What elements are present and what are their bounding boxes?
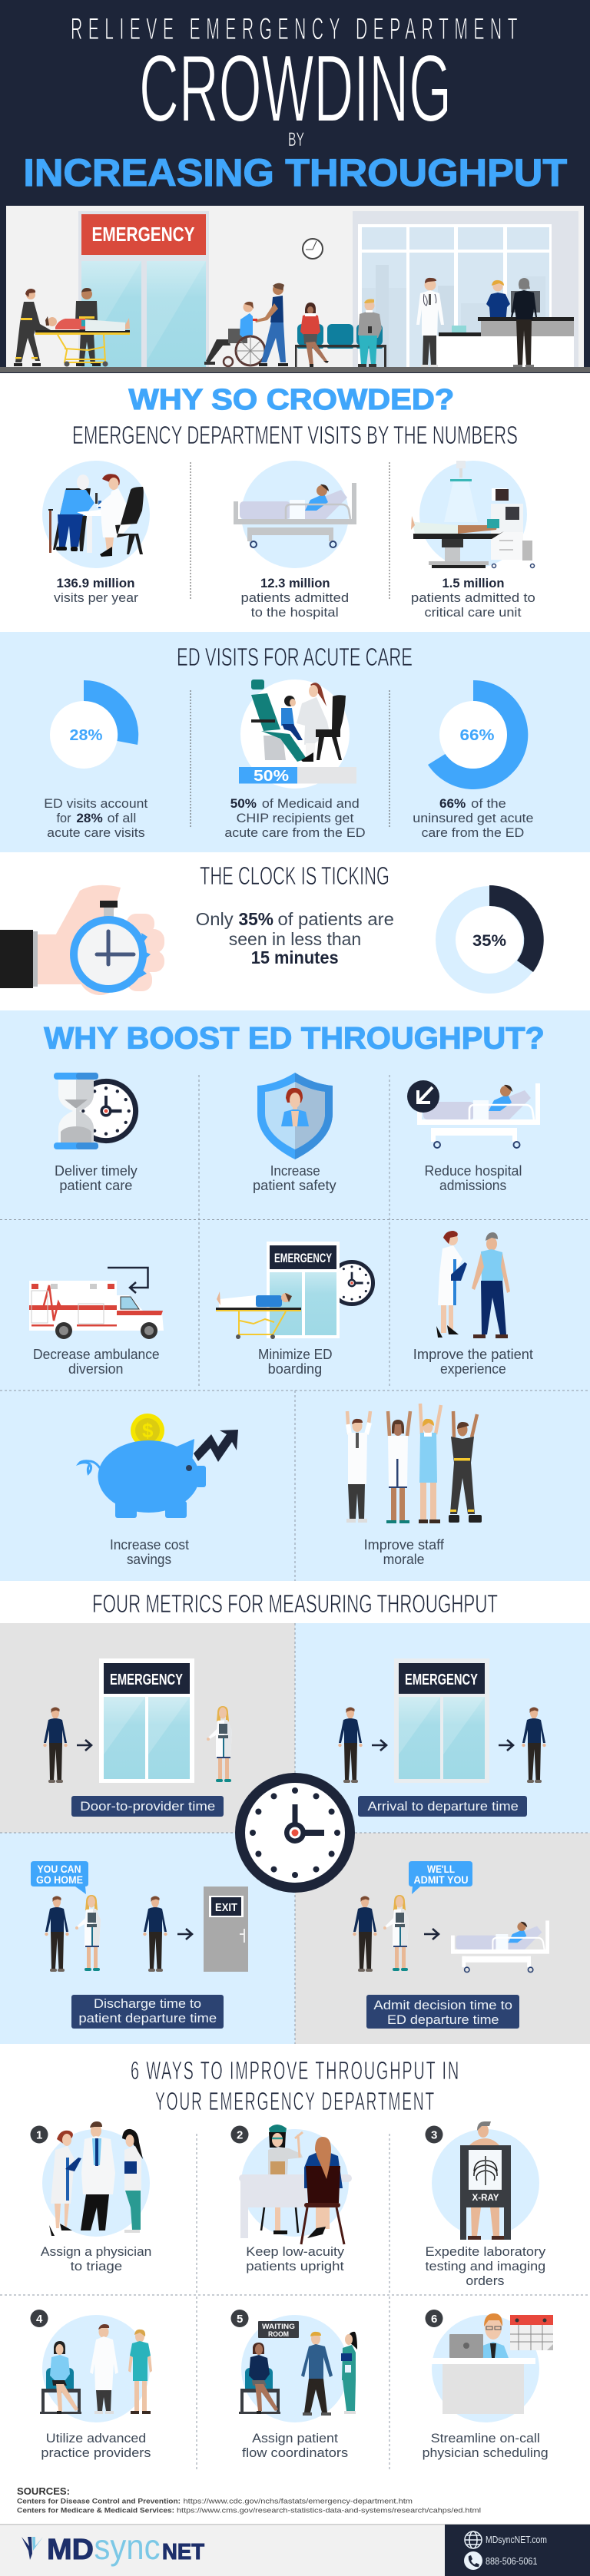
text: decrease ambulance diversion — [33, 1347, 160, 1377]
illustration: child in exam chair with bar — [239, 680, 356, 789]
text: expedite laboratory — [426, 2244, 546, 2288]
title word: by: BY — [288, 129, 304, 150]
text: keep low acuity — [246, 2244, 345, 2273]
illustration: hospital entrance scene — [0, 206, 590, 372]
number badges row two: 6 — [431, 2313, 437, 2326]
text: streamline on-call — [423, 2431, 549, 2460]
stat: admitted to hospital: 12.3 million — [260, 576, 330, 590]
number badges row two: 4 — [36, 2313, 43, 2326]
icon: central clock — [240, 1778, 350, 1887]
doctor — [416, 278, 444, 367]
text: deliver timely patient care: patient care — [59, 1178, 132, 1193]
text: reduce hospital admissions: admissions — [439, 1178, 506, 1193]
text: 66 percent of uninsured — [413, 796, 533, 840]
donut chart: 28 percent — [50, 680, 138, 769]
icon: doctor and patient — [436, 1231, 510, 1338]
text: utilize advanced: practice providers — [41, 2445, 151, 2460]
way 4: advanced practice providers — [40, 2315, 152, 2422]
number badges row two: 5 — [237, 2313, 243, 2326]
stat: visits per year — [54, 576, 138, 605]
text: deliver timely patient care: Deliver timely — [55, 1163, 138, 1179]
text: 28 percent of acute visits: ED visits account — [44, 796, 148, 811]
sources: https://www.cdc.gov/nchs/fastats/emergency-department.htm — [183, 2497, 413, 2506]
speech bubble: we'll admit you — [409, 1861, 472, 1894]
logo: MDsyncNET: MD — [47, 2534, 94, 2566]
text: reduce hospital admissions — [424, 1163, 522, 1193]
sources: SOURCES: — [17, 2485, 70, 2497]
text: improve staff morale: Improve staff — [364, 1537, 445, 1553]
stat: admitted to critical care — [411, 576, 535, 620]
panel: ED visits for acute care — [0, 632, 590, 852]
heading: ED visits for acute care: ED VISITS FOR ACUTE CARE — [177, 643, 413, 671]
way 6: on-call physician scheduling — [432, 2313, 553, 2422]
text: 50 percent of Medicaid and CHIP: CHIP recipients get — [237, 811, 354, 825]
sign: waiting room: ROOM — [268, 2330, 289, 2339]
sign: waiting room: WAITING — [262, 2323, 295, 2331]
number badges row one — [31, 2125, 442, 2144]
text: 28 percent of acute visits: of all — [108, 811, 136, 825]
sign: waiting room — [258, 2321, 299, 2339]
text: improve patient experience — [413, 1347, 533, 1377]
progress bar: 50 percent — [239, 767, 356, 785]
icon: piggy bank with coin and arrow: $ — [142, 1419, 154, 1442]
text: assign a physician: to triage — [71, 2259, 122, 2273]
text: only 35 percent: 35% — [238, 909, 273, 929]
text: 66 percent of uninsured: care from the ED — [422, 825, 524, 840]
reception desk — [436, 291, 574, 367]
text: assign a physician: Assign a physician — [41, 2244, 151, 2259]
text: assign a physician — [41, 2244, 151, 2273]
contact box: 888-506-5061 — [486, 2555, 538, 2567]
text: 28 percent of acute visits — [44, 796, 148, 840]
text: only 35 percent — [196, 909, 394, 967]
text: improve patient experience: Improve the patient — [413, 1347, 533, 1362]
text: increase cost savings: Increase cost — [110, 1537, 189, 1553]
speech bubble: you can go home: GO HOME — [36, 1873, 83, 1886]
speech bubble: you can go home — [31, 1861, 88, 1894]
number badges row one: 2 — [237, 2128, 243, 2142]
sources: https://www.cms.gov/research-statistics-data-and-systems/research/cahps/ed.html — [177, 2506, 481, 2515]
donut chart: 66 percent — [428, 680, 528, 789]
title line: increasing throughput: INCREASING THROUGHPUT — [23, 151, 567, 194]
text: increase patient safety: patient safety — [253, 1178, 336, 1193]
text: only 35 percent: seen in less than — [229, 929, 361, 949]
exit door: EXIT — [215, 1901, 237, 1914]
text: minimize ED boarding — [258, 1347, 332, 1377]
icon: ED boarding: EMERGENCY — [274, 1251, 332, 1265]
text: streamline on-call: Streamline on-call — [431, 2431, 540, 2445]
waiting room window — [353, 211, 578, 367]
text: 50 percent of Medicaid and CHIP — [224, 796, 366, 840]
text: streamline on-call: physician scheduling — [423, 2445, 549, 2460]
text: 66 percent of uninsured: uninsured get acute — [413, 811, 533, 825]
way 1: assign a physician to triage — [42, 2121, 150, 2237]
donut chart: 28 percent: 28% — [69, 727, 103, 744]
text: improve patient experience: experience — [440, 1361, 506, 1377]
icon: phone — [464, 2551, 482, 2570]
icon: hand holding stopwatch — [0, 885, 164, 995]
text: improve staff morale: morale — [383, 1552, 424, 1567]
stat: admitted to hospital — [241, 576, 349, 620]
stretcher with patient — [35, 316, 130, 367]
metric: discharge to departure — [31, 1861, 248, 2029]
text: 28 percent of acute visits: for — [57, 811, 71, 825]
icon: ED boarding — [216, 1242, 373, 1339]
text: 50 percent of Medicaid and CHIP: acute care from the ED — [224, 825, 366, 840]
panel: why so crowded — [42, 384, 535, 620]
stat: visits per year: 136.9 million — [57, 576, 135, 590]
panel: four metrics — [0, 1589, 590, 2044]
text: assign patient — [242, 2431, 348, 2460]
metric: arrival to departure: EMERGENCY — [405, 1672, 478, 1688]
icon: patient visiting doctor — [42, 461, 150, 568]
heading: why boost ED throughput: WHY BOOST ED THROUGHPUT? — [44, 1021, 545, 1055]
donut chart: 35 percent — [446, 885, 544, 984]
way 3: expedite lab and imaging: X-RAY — [472, 2192, 499, 2203]
emergency doors — [78, 211, 209, 367]
text: decrease ambulance diversion: Decrease ambulance — [33, 1347, 160, 1362]
icon: hospital bed — [234, 461, 356, 568]
panel: the clock is ticking — [0, 861, 544, 995]
exit door — [204, 1887, 248, 1972]
waiting room seats and visitors — [295, 299, 386, 367]
receptionist — [486, 280, 510, 317]
text: 66 percent of uninsured: of the — [471, 796, 506, 811]
metric: admit decision to departure: Admit decision time to — [373, 1998, 512, 2012]
paramedic right — [75, 288, 101, 366]
text: increase patient safety — [253, 1163, 336, 1193]
metric: door to provider — [43, 1658, 232, 1817]
text: deliver timely patient care — [55, 1163, 138, 1193]
sources — [17, 2485, 481, 2515]
text: keep low acuity: patients upright — [246, 2259, 344, 2273]
wall clock — [303, 239, 323, 259]
panel: why boost ED throughput — [0, 1010, 590, 1581]
logo: MDsyncNET: NET — [162, 2540, 204, 2564]
text: assign patient: flow coordinators — [242, 2445, 348, 2460]
number badges row one: 1 — [36, 2128, 42, 2142]
text: decrease ambulance diversion: diversion — [68, 1361, 123, 1377]
panel: six ways to improve — [0, 2056, 590, 2471]
progress bar: 50 percent: 50% — [254, 768, 289, 785]
logo: MDsyncNET — [22, 2527, 204, 2567]
text: 66 percent of uninsured: 66% — [439, 796, 466, 811]
stat: admitted to critical care: 1.5 million — [442, 576, 504, 590]
text: increase patient safety: Increase — [270, 1163, 320, 1179]
text: expedite laboratory: Expedite laboratory — [426, 2244, 546, 2259]
metric: discharge to departure: patient departure time — [78, 2011, 217, 2025]
metric: admit decision to departure: ED departure time — [387, 2012, 499, 2027]
sources: Centers for Disease Control and Prevention: — [17, 2497, 181, 2506]
icon: celebrating staff — [346, 1404, 482, 1523]
metric: door to provider: EMERGENCY — [110, 1672, 183, 1688]
text: minimize ED boarding: boarding — [268, 1361, 322, 1377]
text: increase cost savings: savings — [127, 1552, 171, 1567]
speech bubble: you can go home: YOU CAN — [37, 1863, 81, 1875]
heading: clock is ticking: THE CLOCK IS TICKING — [200, 861, 389, 890]
wheelchair patient and helper — [204, 283, 288, 366]
text: expedite laboratory: testing and imaging — [426, 2259, 545, 2273]
stat: admitted to critical care: patients admitted to — [411, 590, 535, 605]
text: 50 percent of Medicaid and CHIP: 50% — [230, 796, 257, 811]
text: reduce hospital admissions: Reduce hospital — [424, 1163, 522, 1179]
icon: globe — [465, 2531, 482, 2548]
stat: admitted to critical care: critical care unit — [424, 605, 522, 620]
metric: discharge to departure: Discharge time to — [94, 1996, 201, 2011]
heading: why so crowded: WHY SO CROWDED? — [129, 384, 454, 416]
metric: door to provider: Door-to-provider time — [80, 1799, 215, 1814]
contact box: MDsyncNET.com — [486, 2534, 547, 2545]
stat: visits per year: visits per year — [54, 590, 138, 605]
metric: arrival to departure: Arrival to departure time — [367, 1799, 519, 1814]
number badges row two — [31, 2310, 442, 2327]
stat: admitted to hospital: to the hospital — [251, 605, 339, 620]
text: 50 percent of Medicaid and CHIP: of Medicaid and — [262, 796, 360, 811]
text: increase cost savings — [110, 1537, 189, 1567]
emergency doors: EMERGENCY — [92, 223, 195, 246]
icon: piggy bank with coin and arrow — [79, 1414, 238, 1518]
text: only 35 percent: 15 minutes — [251, 947, 339, 967]
icon: ambulance with diversion arrow — [29, 1268, 164, 1339]
metric: arrival to departure — [338, 1658, 546, 1817]
text: utilize advanced: Utilize advanced — [46, 2431, 146, 2445]
text: minimize ED boarding: Minimize ED — [258, 1347, 332, 1362]
text: expedite laboratory: orders — [466, 2273, 504, 2288]
speech bubble: we'll admit you: ADMIT YOU — [413, 1873, 469, 1886]
icon: reduced admissions bed — [407, 1080, 540, 1148]
number badges row one: 3 — [431, 2128, 437, 2142]
logo: MDsyncNET: sync — [94, 2527, 160, 2567]
paramedic left — [14, 289, 51, 366]
way 2: keep low acuity patients upright — [239, 2125, 352, 2244]
icon: critical care operating table — [411, 461, 535, 568]
text: keep low acuity: Keep low-acuity — [246, 2244, 345, 2259]
footer — [0, 2524, 590, 2576]
text: utilize advanced — [41, 2431, 151, 2460]
stat: admitted to hospital: patients admitted — [241, 590, 349, 605]
text: 28 percent of acute visits: acute care visits — [47, 825, 145, 840]
contact box — [445, 2525, 590, 2576]
text: improve staff morale — [364, 1537, 445, 1567]
icon: patient safety shield — [257, 1073, 333, 1159]
way 5: patient flow coordinators — [239, 2315, 357, 2422]
text: assign patient: Assign patient — [252, 2431, 338, 2445]
metric: admit decision to departure — [353, 1861, 549, 2029]
text: only 35 percent: Only — [196, 909, 234, 929]
panel: header — [0, 0, 590, 373]
donut chart: 35 percent: 35% — [472, 932, 506, 950]
visitor at desk — [511, 278, 537, 367]
sources: Centers for Medicare & Medicaid Services: — [17, 2506, 174, 2515]
text: only 35 percent: of patients are — [278, 909, 394, 929]
icon: hourglass and clock — [54, 1073, 136, 1149]
text: 28 percent of acute visits: 28% — [76, 811, 103, 825]
speech bubble: we'll admit you: WE'LL — [427, 1863, 455, 1875]
way 3: expedite lab and imaging — [432, 2121, 539, 2240]
donut chart: 66 percent: 66% — [459, 727, 495, 744]
